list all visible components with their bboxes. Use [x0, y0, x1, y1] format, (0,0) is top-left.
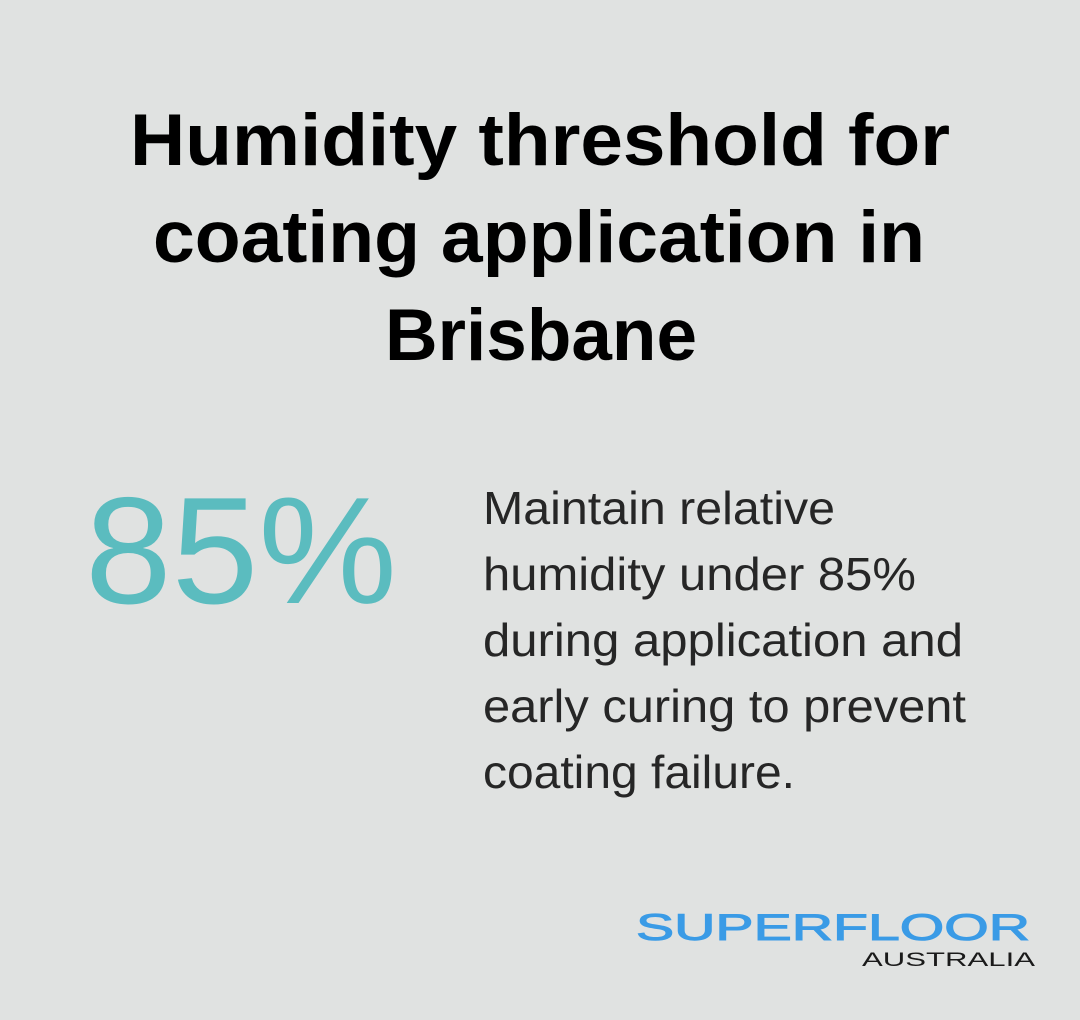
title: Humidity threshold for: [130, 100, 950, 181]
title: Brisbane: [385, 295, 697, 376]
title: [130, 100, 950, 376]
title: coating application in: [153, 197, 925, 278]
description text: early curing to prevent: [483, 680, 966, 732]
logo: AUSTRALIA: [862, 950, 1036, 971]
description text: Maintain relative: [483, 482, 835, 534]
description text: humidity under 85%: [483, 548, 916, 600]
stat: 85%: 85%: [85, 466, 397, 636]
description text: during application and: [483, 614, 963, 666]
logo: SUPERFLOOR: [636, 907, 1030, 948]
description text: coating failure.: [483, 746, 795, 798]
description text: [483, 482, 966, 798]
logo: [636, 907, 1036, 971]
